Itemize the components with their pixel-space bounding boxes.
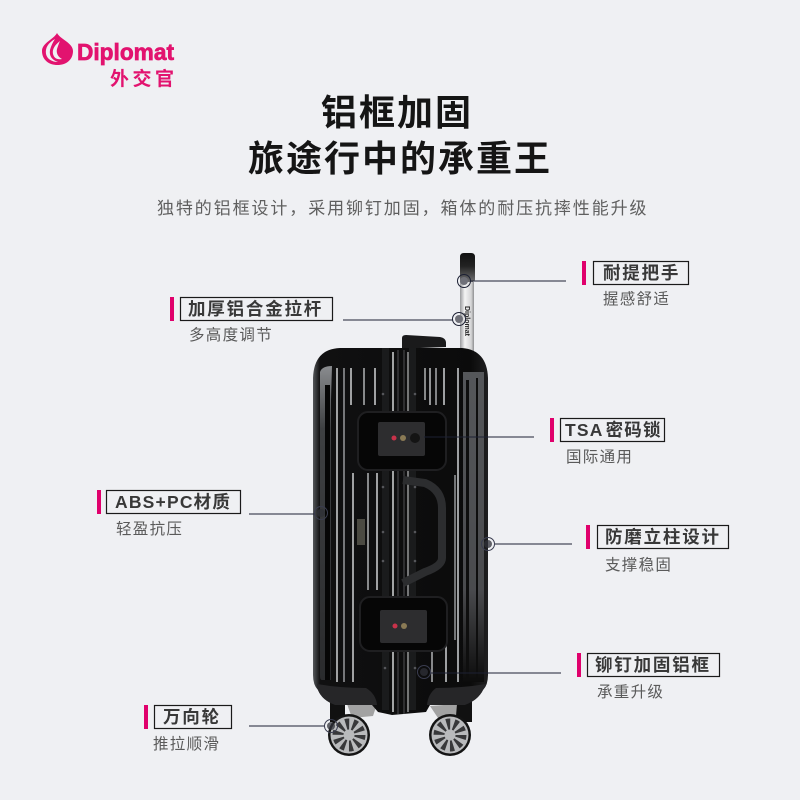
icon: logo drop [42,33,73,65]
plate badge [357,519,365,545]
title [248,92,552,179]
title: 旅途行中的承重王 [248,138,552,179]
callout: 耐提把手: 握感舒适 [603,290,670,308]
callout: 加厚铝合金拉杆 [170,297,466,344]
subtitle text: 独特的铝框设计，采用铆钉加固，箱体的耐压抗摔性能升级 [157,199,648,218]
logo wordmark: Diplomat [77,39,174,65]
side carrying handle [403,480,442,583]
logo: Diplomat [42,33,178,90]
wheels [328,700,472,756]
callout: 加厚铝合金拉杆: 加厚铝合金拉杆 [188,299,323,319]
callout: 万向轮: 推拉顺滑 [153,735,220,753]
callout: TSA密码锁: 国际通用 [566,448,633,466]
upper lock recess [358,412,446,470]
telescopic handle: Diplomat [463,306,470,337]
callout: TSA密码锁: TSA密码锁 [565,420,662,440]
aluminium frame band [382,348,416,714]
callout: ABS+PC材质: ABS+PC材质 [115,492,231,512]
title: 铝框加固 [321,92,473,133]
callout: ABS+PC材质 [97,490,328,538]
suitcase body [313,348,488,715]
callout: 防磨立柱设计: 防磨立柱设计 [605,527,721,547]
logo Chinese name: 外交官 [110,67,178,90]
top carry handle [402,335,446,348]
telescopic handle [460,253,475,352]
callout: 防磨立柱设计: 支撑稳固 [605,556,672,574]
side gloss bands [320,366,484,682]
rivets [382,393,416,669]
callout: 铆钉加固铝框: 铆钉加固铝框 [595,655,711,675]
callout: 防磨立柱设计 [482,525,728,574]
callout: 耐提把手: 耐提把手 [603,263,680,283]
callout: 万向轮: 万向轮 [163,707,221,727]
bottom corner caps [317,684,377,705]
callout: 铆钉加固铝框: 承重升级 [597,683,664,701]
TSA lock bottom [380,610,427,643]
callout: 加厚铝合金拉杆: 多高度调节 [189,326,273,344]
callout: 万向轮 [144,705,338,753]
lower lock recess [360,597,447,651]
callout: 铆钉加固铝框 [418,653,720,701]
TSA lock top [378,422,425,456]
suitcase illustration [313,253,488,756]
vertical ribs [337,368,458,682]
callout: 耐提把手 [458,261,688,308]
callout: TSA密码锁 [424,418,664,466]
callout: ABS+PC材质: 轻盈抗压 [116,520,183,538]
